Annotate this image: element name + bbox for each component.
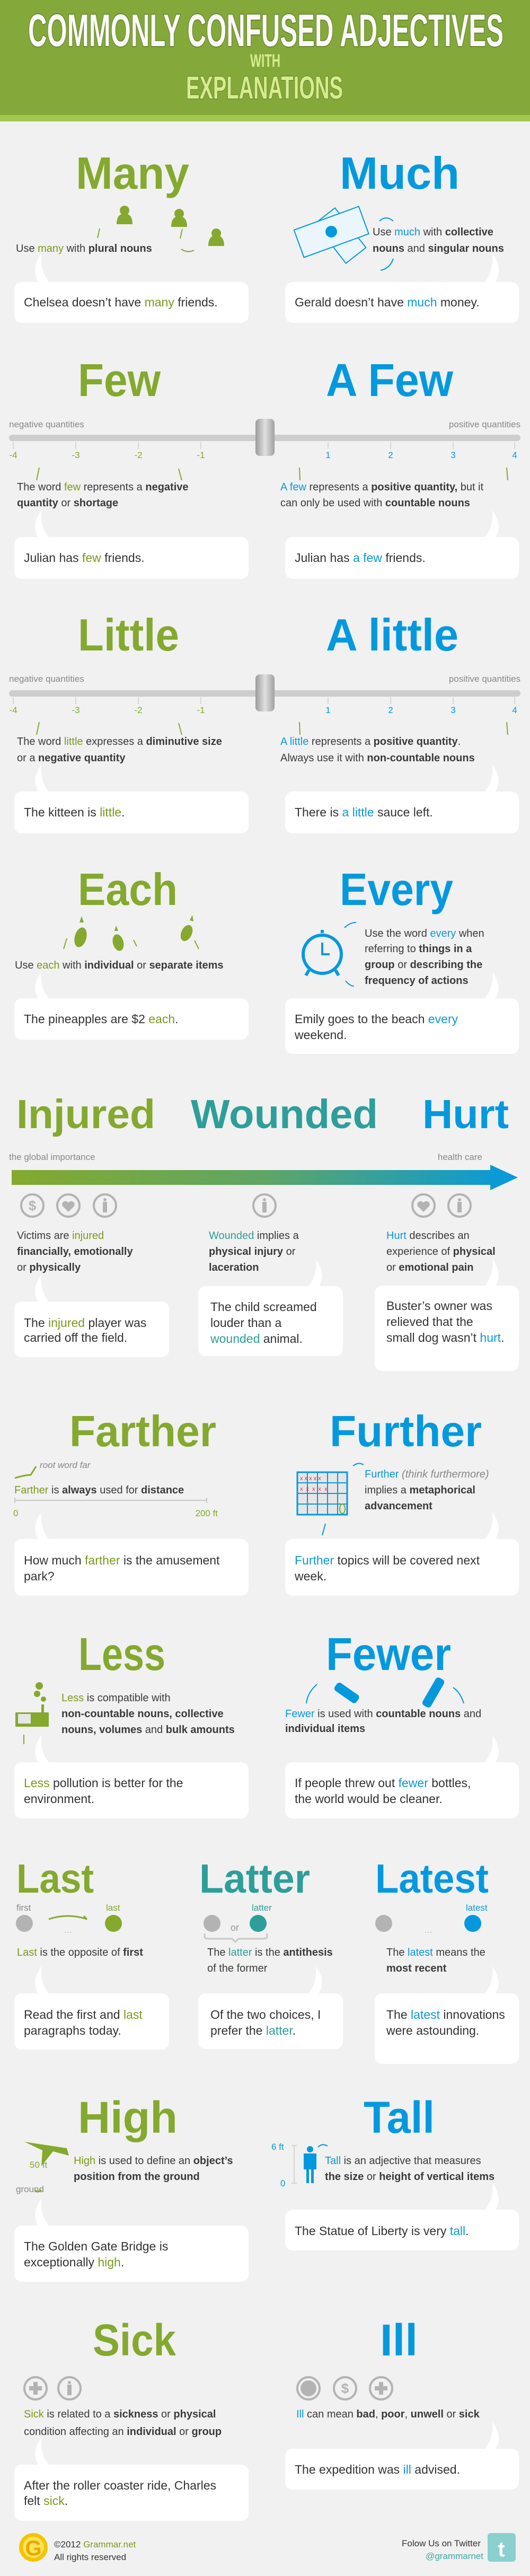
callout: little example: The kitteen is little.	[24, 805, 125, 819]
number line: -1	[197, 450, 205, 460]
callout: latter example	[198, 1966, 343, 2049]
callout: less example: Less pollution is better for the	[24, 1776, 183, 1790]
title: many: Many	[76, 148, 189, 199]
text: every desc: Use the word every when	[365, 928, 484, 939]
number line: 4	[512, 450, 517, 460]
callout: high example: The Golden Gate Bridge is	[24, 2239, 168, 2253]
section: less / fewer	[14, 1629, 519, 1818]
callout: a little example	[285, 764, 519, 833]
callout: latest example: were astounding.	[386, 2024, 479, 2037]
distance scale	[13, 1498, 218, 1518]
text: many desc: Use many with plural nouns	[16, 243, 152, 254]
gradient arrow: the global importance	[9, 1152, 95, 1162]
gradient arrow	[9, 1152, 518, 1190]
icon: plane: ground	[16, 2184, 44, 2194]
icon: person height	[271, 2142, 328, 2188]
callout: every example	[285, 971, 519, 1054]
section: many / much	[14, 148, 519, 323]
number line: negative quantities	[9, 419, 84, 429]
title: few: Few	[78, 355, 161, 406]
callout: further example: Further topics will be covered next	[295, 1553, 480, 1567]
callout: high example: exceptionally high.	[24, 2255, 124, 2269]
callout: tall example	[285, 2183, 519, 2250]
section: each / every: referring to things in a	[365, 943, 472, 955]
diagram: last: ...	[64, 1924, 72, 1935]
text: ill desc: Ill can mean bad, poor, unwell or sick	[296, 2408, 480, 2420]
section: last / latter / latest: of the former	[207, 1963, 268, 1974]
footer: @grammarnet	[426, 2551, 483, 2561]
diagram: last: first	[16, 1903, 31, 1913]
text: latest desc: The latest means the	[386, 1947, 485, 1958]
callout: ill example: The expedition was ill advised.	[295, 2463, 460, 2476]
section: less / fewer: non-countable nouns, collective	[61, 1708, 224, 1720]
section: farther / further	[13, 1406, 519, 1596]
title: injured: Injured	[16, 1092, 155, 1137]
callout: sick example: felt sick.	[24, 2494, 68, 2508]
text: each desc: Use each with individual or separate items	[15, 960, 224, 971]
icons: gray circles	[21, 1194, 471, 1217]
subtitle with: WITH	[250, 51, 280, 71]
icons: gray circles: $	[341, 2380, 349, 2396]
callout: hurt example: Buster’s owner was	[386, 1299, 492, 1313]
section: injured / wounded / hurt: financially, emotionally	[17, 1246, 133, 1258]
callout: tall example: The Statue of Liberty is very tall.	[295, 2224, 469, 2238]
icon: calendar	[297, 1463, 364, 1535]
section: each / every: group or describing the	[365, 959, 482, 971]
title: a little: A little	[326, 610, 458, 661]
callout: much example: Gerald doesn’t have much money.	[295, 295, 480, 309]
icon: calendar: x x x x x	[300, 1475, 321, 1482]
callout: many example	[14, 253, 249, 323]
number line: positive quantities	[449, 419, 520, 429]
title: high: High	[78, 2093, 178, 2142]
callout: sick example: After the roller coaster ride, Charles	[24, 2478, 216, 2492]
callout: wounded example: The child screamed	[210, 1300, 317, 1314]
callout: latest example: The latest innovations	[386, 2008, 505, 2021]
section: sick / ill: condition affecting an individual or group	[24, 2426, 222, 2438]
callout: farther example: How much farther is the amusement	[24, 1553, 220, 1567]
gradient arrow: health care	[438, 1152, 482, 1162]
callout: injured example: The injured player was	[24, 1316, 146, 1330]
icon: factory	[15, 1682, 49, 1744]
callout: fewer example: If people threw out fewer bottles,	[295, 1776, 471, 1790]
section: high / tall: the size or height of vertical items	[325, 2171, 494, 2183]
section: few / a few: quantity or shortage	[17, 497, 118, 509]
diagram: latter: or	[231, 1922, 239, 1933]
text: fewer desc: Fewer is used with countable nouns and	[285, 1708, 481, 1720]
text: high desc: High is used to define an object’s	[74, 2155, 233, 2167]
diagram: latest: latest	[466, 1903, 488, 1913]
section: less / fewer: individual items	[285, 1723, 365, 1735]
number line: -1	[197, 705, 205, 715]
title: latest: Latest	[375, 1856, 489, 1902]
number line: 3	[450, 450, 456, 460]
callout: injured example: carried off the field.	[24, 1331, 127, 1344]
callout: hurt example: small dog wasn’t hurt.	[386, 1331, 504, 1344]
text: wounded desc: Wounded implies a	[209, 1230, 299, 1242]
callout: latest example	[375, 1966, 519, 2064]
text: a little desc: A little represents a positive quantity.	[280, 736, 461, 748]
section: injured / wounded / hurt: laceration	[209, 1262, 259, 1273]
callout: less example	[14, 1735, 249, 1818]
section: last / latter / latest	[14, 1856, 519, 2064]
icon: plane	[16, 2142, 69, 2194]
section: less / fewer: nouns, volumes and bulk amounts	[61, 1724, 235, 1736]
title: further: Further	[330, 1406, 482, 1456]
callout: high example	[14, 2199, 249, 2282]
number line: -2	[134, 705, 143, 715]
icons: gray circles	[24, 2377, 392, 2399]
icon: money	[294, 206, 393, 270]
number line: 1	[325, 705, 331, 715]
text: farther desc: Farther is always used for distance	[14, 1484, 184, 1496]
icon: clock	[303, 922, 356, 986]
icon: twitter	[488, 2533, 516, 2562]
title: much: Much	[340, 148, 460, 199]
number line: -4	[9, 450, 17, 460]
callout: a few example: Julian has a few friends.	[295, 551, 426, 565]
number line	[9, 419, 520, 480]
text: copyright: ©2012 Grammar.net	[54, 2539, 136, 2549]
text: latter desc: The latter is the antithesis	[207, 1947, 333, 1958]
title: a few: A Few	[326, 355, 453, 406]
callout: latter example: Of the two choices, I	[210, 2008, 321, 2021]
callout: much example	[285, 253, 519, 323]
callout: hurt example	[375, 1259, 519, 1371]
callout: last example	[14, 1966, 169, 2050]
callout: fewer example	[285, 1735, 519, 1818]
section: last / latter / latest: most recent	[386, 1963, 447, 1974]
section: high / tall: position from the ground	[74, 2171, 200, 2183]
distance scale: 0	[13, 1508, 18, 1518]
callout: few example	[14, 510, 249, 579]
diagram: last	[16, 1903, 122, 1935]
title: every: Every	[340, 865, 453, 915]
icon: pineapples	[64, 915, 199, 952]
title: latter: Latter	[199, 1856, 310, 1902]
title: wounded: Wounded	[191, 1092, 378, 1137]
callout: hurt example: relieved that the	[386, 1315, 473, 1329]
title: hurt: Hurt	[422, 1092, 509, 1137]
section: little / a little: Always use it with non-countable nouns	[280, 752, 475, 764]
section: few / a few: can only be used with countable nouns	[280, 497, 470, 509]
diagram: latest	[375, 1903, 488, 1935]
number line: 3	[450, 705, 456, 715]
number line: negative quantities	[9, 674, 84, 684]
number line: -2	[134, 450, 143, 460]
text: further desc: Further (think furthermore)	[365, 1469, 489, 1480]
callout: last example: paragraphs today.	[24, 2024, 121, 2037]
title: less: Less	[78, 1629, 165, 1680]
title: little: Little	[78, 610, 179, 661]
number line: -3	[72, 450, 80, 460]
footer: All rights reserved	[54, 2552, 126, 2562]
callout: each example: The pineapples are $2 each.	[24, 1012, 179, 1026]
text: little desc: The word little expresses a diminutive size	[17, 736, 222, 748]
icon: twitter: t	[498, 2538, 505, 2561]
section: sick / ill	[14, 2315, 519, 2521]
icon: grammar logo	[19, 2533, 48, 2562]
text: sick desc: Sick is related to a sickness or physical	[24, 2408, 216, 2420]
callout: wounded example	[198, 1259, 343, 1356]
callout: each example	[14, 971, 249, 1040]
callout: last example: Read the first and last	[24, 2008, 143, 2021]
diagram: latter: latter	[252, 1903, 272, 1913]
title: tall: Tall	[364, 2093, 435, 2142]
callout: farther example	[14, 1512, 249, 1596]
title: each: Each	[78, 865, 178, 915]
section: many / much: nouns and singular nouns	[373, 243, 504, 254]
callout: sick example	[14, 2438, 249, 2521]
callout: a little example: There is a little sauce left.	[295, 805, 433, 819]
diagram: latter	[204, 1903, 272, 1942]
icon: bottles	[306, 1676, 464, 1709]
diagram: latest: ...	[424, 1924, 432, 1935]
callout: further example	[285, 1512, 519, 1596]
diagram: last: last	[106, 1903, 120, 1913]
title: farther: Farther	[69, 1406, 216, 1456]
text: twitter follow: Folow Us on Twitter	[402, 2538, 481, 2548]
text: root word: root word far	[40, 1460, 91, 1470]
number line: positive quantities	[449, 674, 520, 684]
text: injured desc: Victims are injured	[17, 1230, 104, 1242]
icon: plane: 50 ft	[30, 2160, 47, 2170]
callout: little example	[14, 764, 249, 833]
title: fewer: Fewer	[326, 1629, 451, 1680]
callout: farther example: park?	[24, 1569, 55, 1583]
callout: wounded example: wounded animal.	[210, 1332, 303, 1346]
icon: person height: 6 ft	[271, 2142, 284, 2152]
callout: few example: Julian has few friends.	[24, 551, 145, 565]
text: tall desc: Tall is an adjective that measures	[325, 2155, 481, 2167]
footer	[19, 2533, 516, 2562]
icon: person height: 0	[280, 2178, 285, 2188]
text: hurt desc: Hurt describes an	[386, 1230, 470, 1242]
number line: 4	[512, 705, 517, 715]
text: less desc: Less is compatible with	[61, 1692, 171, 1704]
text: few desc: The word few represents a negative	[17, 481, 189, 493]
section: injured / wounded / hurt	[9, 1092, 519, 1371]
section: little / a little: or a negative quantity	[17, 752, 126, 764]
callout: every example: Emily goes to the beach every	[295, 1012, 458, 1026]
callout: further example: week.	[294, 1569, 326, 1583]
number line: 1	[325, 450, 331, 460]
callout: a few example	[285, 510, 519, 579]
icon: people	[98, 206, 224, 252]
section: each / every	[14, 865, 519, 1054]
callout: every example: weekend.	[294, 1028, 347, 1042]
callout: wounded example: louder than a	[210, 1316, 281, 1330]
subtitle explanations: EXPLANATIONS	[186, 70, 343, 105]
callout: fewer example: the world would be cleaner.	[295, 1792, 443, 1806]
number line: -3	[72, 705, 80, 715]
section: farther / further: advancement	[365, 1500, 432, 1512]
section: farther / further: implies a metaphorical	[365, 1484, 475, 1496]
icons: gray circles: $	[29, 1198, 37, 1214]
callout: injured example	[14, 1274, 169, 1357]
number line	[9, 674, 520, 735]
section: injured / wounded / hurt: experience of physical	[386, 1246, 496, 1258]
section: injured / wounded / hurt: or emotional pain	[386, 1262, 473, 1273]
text: last desc: Last is the opposite of first	[17, 1947, 143, 1958]
section: few / a few	[9, 355, 520, 579]
title: sick: Sick	[93, 2315, 176, 2365]
section: high / tall	[14, 2093, 519, 2282]
number line: -4	[9, 705, 17, 715]
header banner	[0, 0, 530, 121]
distance scale: 200 ft	[195, 1508, 218, 1518]
section: injured / wounded / hurt: physical injury or	[209, 1246, 296, 1258]
callout: less example: environment.	[24, 1792, 94, 1806]
title: last: Last	[16, 1856, 94, 1902]
icon: grammar logo: G	[25, 2537, 42, 2560]
section: each / every: frequency of actions	[365, 975, 469, 987]
text: much desc: Use much with collective	[373, 226, 493, 238]
section: little / a little	[9, 610, 520, 833]
callout: latter example: prefer the latter.	[210, 2024, 296, 2037]
title: ill: Ill	[380, 2315, 418, 2365]
number line: 2	[388, 705, 393, 715]
icon: calendar: xxxxx	[300, 1486, 331, 1492]
callout: many example: Chelsea doesn’t have many friends.	[24, 295, 218, 309]
number line: 2	[388, 450, 393, 460]
section: injured / wounded / hurt: or physically	[17, 1262, 81, 1273]
callout: ill example	[285, 2422, 519, 2490]
text: a few desc: A few represents a positive quantity, but it	[280, 481, 484, 493]
